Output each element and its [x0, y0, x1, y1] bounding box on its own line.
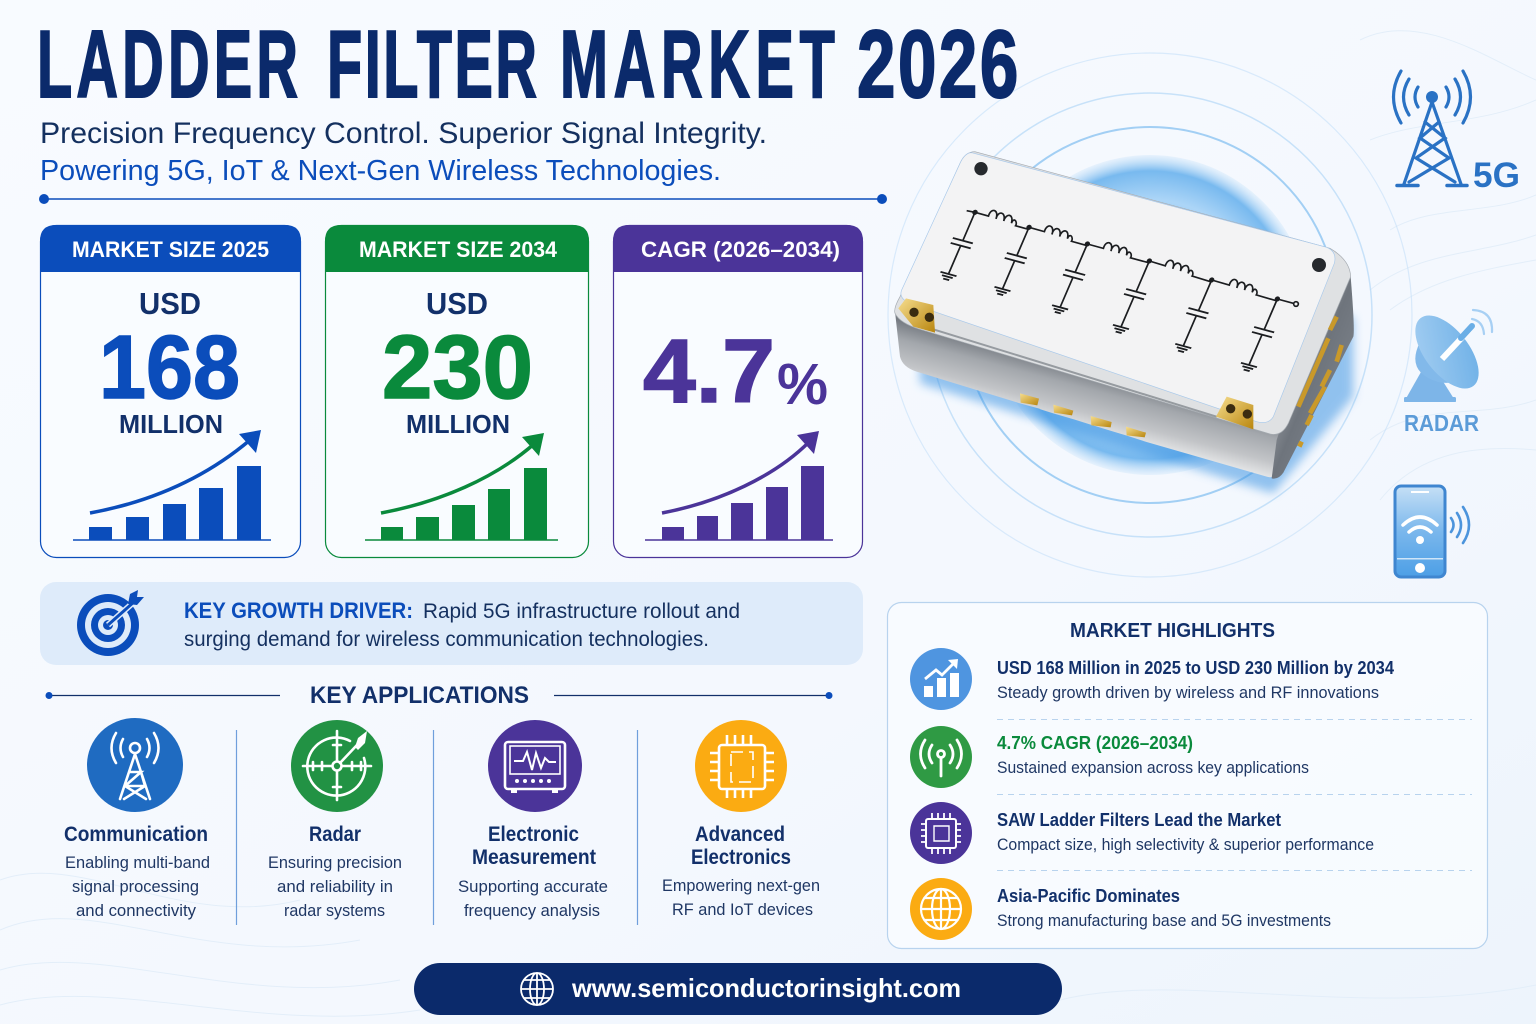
icon: oscilloscope [488, 720, 582, 812]
subtitle: Precision Frequency Control. Superior Signal Integrity. [40, 117, 767, 150]
highlight text: 4.7% CAGR (2026–2034) [997, 733, 1193, 753]
panel: key growth driver [40, 582, 863, 665]
icon: smartphone wifi [1395, 486, 1469, 577]
icon: 5G tower [1394, 71, 1470, 186]
value: USD 168 million: 168 [99, 318, 240, 418]
device body: right side [1272, 277, 1354, 479]
highlight text [997, 886, 1331, 930]
title: MARKET [560, 10, 835, 118]
highlight: Asia-Pacific [910, 878, 1331, 940]
icon: tower [87, 718, 183, 812]
advanced electronics text: Electronics [691, 846, 791, 869]
device rim [895, 152, 1351, 434]
title: LADDER [37, 10, 298, 118]
highlight text [997, 733, 1309, 777]
icon: radar scope [291, 720, 383, 812]
value: USD 230 million: MILLION [406, 409, 510, 439]
application: electronic measurement [458, 720, 608, 920]
highlight: SAW ladder filters [910, 802, 1374, 864]
electronic measurement text [458, 823, 608, 920]
gold bottom pins [1020, 393, 1146, 437]
percent sign: % [777, 352, 828, 417]
device top face [901, 153, 1335, 423]
growth chart [365, 433, 558, 540]
panel: market size 2034 [325, 225, 589, 558]
card header [40, 225, 301, 272]
title: FILTER [327, 10, 537, 118]
value: USD 168 million: USD [139, 286, 201, 321]
driver text [184, 598, 740, 651]
icon: chip [910, 802, 972, 864]
highlight text: USD 168 Million in 2025 to USD 230 Million by 2034 [997, 658, 1394, 678]
icon: target [77, 590, 144, 656]
advanced electronics text: Advanced [695, 823, 785, 846]
icon: radar dish [1403, 305, 1492, 402]
highlight text [997, 658, 1394, 702]
driver text: surging demand for wireless communication technologies. [184, 627, 709, 651]
card header: MARKET SIZE 2034 [359, 237, 558, 262]
highlight text: Sustained expansion across key applications [997, 758, 1309, 777]
advanced electronics text [662, 823, 820, 919]
value: USD 168 million [99, 286, 240, 439]
card header [325, 225, 589, 272]
communication text: and connectivity [76, 901, 196, 920]
footer: website pill [414, 963, 1062, 1015]
title [37, 10, 1018, 118]
icon: globe [910, 878, 972, 940]
radar text: and reliability in [277, 877, 393, 896]
application: radar [268, 720, 402, 920]
electronic measurement text: Electronic [488, 823, 579, 846]
mounting holes [974, 162, 1326, 272]
advanced electronics text: RF and IoT devices [672, 900, 813, 919]
application: advanced electronics [662, 720, 820, 919]
electronic measurement text: Supporting accurate [458, 877, 608, 896]
icon: microchip [695, 720, 787, 812]
icon: bar chart [910, 648, 972, 710]
communication text: Communication [64, 823, 208, 846]
card header: CAGR (2026–2034) [641, 237, 840, 262]
highlight: market growth [910, 648, 1394, 710]
communication text: Enabling multi-band [65, 853, 210, 872]
growth chart [645, 431, 833, 540]
panel: market highlights [888, 602, 1488, 948]
heading: key applications [46, 682, 832, 709]
highlight text [997, 810, 1374, 854]
ladder circuit schematic [936, 206, 1298, 373]
highlight: CAGR [910, 726, 1309, 788]
icon: antenna [910, 726, 972, 788]
driver text: Rapid 5G infrastructure rollout and [423, 599, 740, 623]
radar text: radar systems [284, 901, 385, 920]
signal rings behind device [888, 53, 1412, 577]
communication text [64, 823, 210, 920]
heading: key applications: KEY APPLICATIONS [310, 682, 529, 709]
value: USD 230 million [382, 286, 533, 439]
driver text: KEY GROWTH DRIVER: [184, 598, 413, 623]
panel: CAGR [613, 225, 863, 558]
device body: front [895, 307, 1280, 477]
gold corner pads [898, 298, 1253, 429]
icon: globe [521, 973, 553, 1005]
highlight text: Asia-Pacific Dominates [997, 886, 1180, 906]
value: USD 230 million: 230 [382, 318, 533, 418]
card header [613, 225, 863, 272]
value: USD 168 million: MILLION [119, 409, 223, 439]
highlight text: SAW Ladder Filters Lead the Market [997, 810, 1281, 830]
advanced electronics text: Empowering next-gen [662, 876, 820, 895]
subtitle [40, 117, 767, 187]
radar text: Radar [309, 823, 361, 846]
radar text: Ensuring precision [268, 853, 402, 872]
card header: MARKET SIZE 2025 [72, 237, 269, 262]
subtitle divider [39, 194, 887, 204]
label: radar: RADAR [1404, 410, 1479, 436]
application: communication [64, 718, 210, 920]
value: 4.7%: 4.7 [643, 322, 775, 422]
electronic measurement text: Measurement [472, 846, 596, 869]
communication text: signal processing [72, 877, 199, 896]
subtitle: Powering 5G, IoT & Next-Gen Wireless Technologies. [40, 155, 721, 187]
title: 2026 [857, 10, 1018, 118]
panel: market size 2025 [40, 225, 301, 558]
label: 5G: 5G [1473, 156, 1520, 195]
website url: www.semiconductorinsight.com [571, 973, 961, 1003]
radar text [268, 823, 402, 920]
electronic measurement text: frequency analysis [464, 901, 600, 920]
value: USD 230 million: USD [426, 286, 488, 321]
ladder filter device [895, 152, 1354, 493]
highlight text: Compact size, high selectivity & superior performance [997, 835, 1374, 854]
gold side pins [1298, 317, 1342, 447]
highlight text: Steady growth driven by wireless and RF innovations [997, 683, 1379, 702]
highlight text: Strong manufacturing base and 5G investments [997, 911, 1331, 930]
heading: market highlights: MARKET HIGHLIGHTS [1070, 619, 1275, 642]
growth chart [73, 430, 271, 540]
